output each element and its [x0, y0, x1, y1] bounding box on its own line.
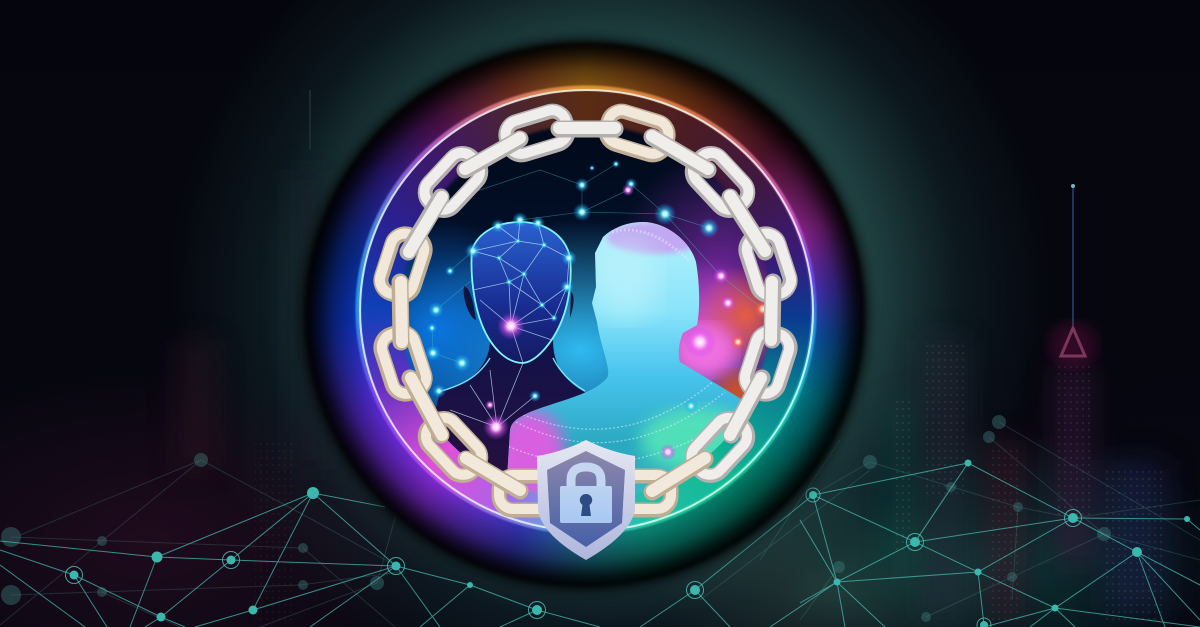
- chain bar: right lower: [730, 378, 762, 435]
- starfield network lines: [432, 164, 760, 362]
- chain link: top left: [502, 107, 572, 158]
- chain link: bottom right behind shield: [609, 475, 671, 510]
- panel: starfield inside the chain: [401, 125, 771, 495]
- chain link: upper left: [419, 147, 487, 216]
- chain bar: top: [559, 128, 615, 129]
- nebula glow behind right shoulder: [678, 320, 767, 399]
- panel: portrait scene with two figures: [426, 160, 767, 494]
- chain link: lower right: [686, 412, 754, 481]
- chain link: left upper: [376, 230, 429, 300]
- chain link: bottom left behind shield: [499, 475, 561, 510]
- chain link: top right: [602, 107, 672, 158]
- chain link: right upper: [742, 230, 795, 300]
- right figure: silhouette with nebula body: [508, 222, 741, 494]
- panel: area between ring and chain: [360, 90, 812, 530]
- padlock body: [560, 486, 612, 523]
- chain link: right lower: [741, 328, 794, 398]
- chain bar: right upper: [730, 196, 765, 252]
- chain link: upper right: [686, 147, 754, 216]
- chain link: left lower: [377, 328, 430, 398]
- shield inner hexagon: [547, 451, 625, 547]
- icon: neon ring core: [359, 89, 814, 532]
- icon: neon ring glow: [354, 84, 818, 536]
- left figure: head: [471, 222, 571, 363]
- left figure: shoulder outline: [438, 358, 585, 392]
- left figure: face wireframe: [450, 220, 569, 427]
- chain bar: bottom right: [652, 458, 705, 492]
- left figure: wireframe torso: [436, 340, 586, 471]
- chain bar: top right: [652, 136, 708, 170]
- chain bar: left upper: [408, 197, 442, 252]
- chain bar: left: [400, 282, 402, 342]
- chain bar: left lower: [410, 378, 442, 435]
- chain link: lower left: [419, 412, 487, 481]
- chain bar: right: [771, 282, 773, 340]
- shield outer plate: [537, 440, 635, 560]
- chain bar: top left: [465, 138, 520, 170]
- chain bar: bottom left: [466, 458, 520, 491]
- left figure: ears: [464, 286, 574, 320]
- padlock shackle: [571, 467, 601, 487]
- stars: [425, 160, 772, 460]
- panel: glowing outer disc: [305, 42, 865, 587]
- padlock keyhole: [580, 494, 592, 516]
